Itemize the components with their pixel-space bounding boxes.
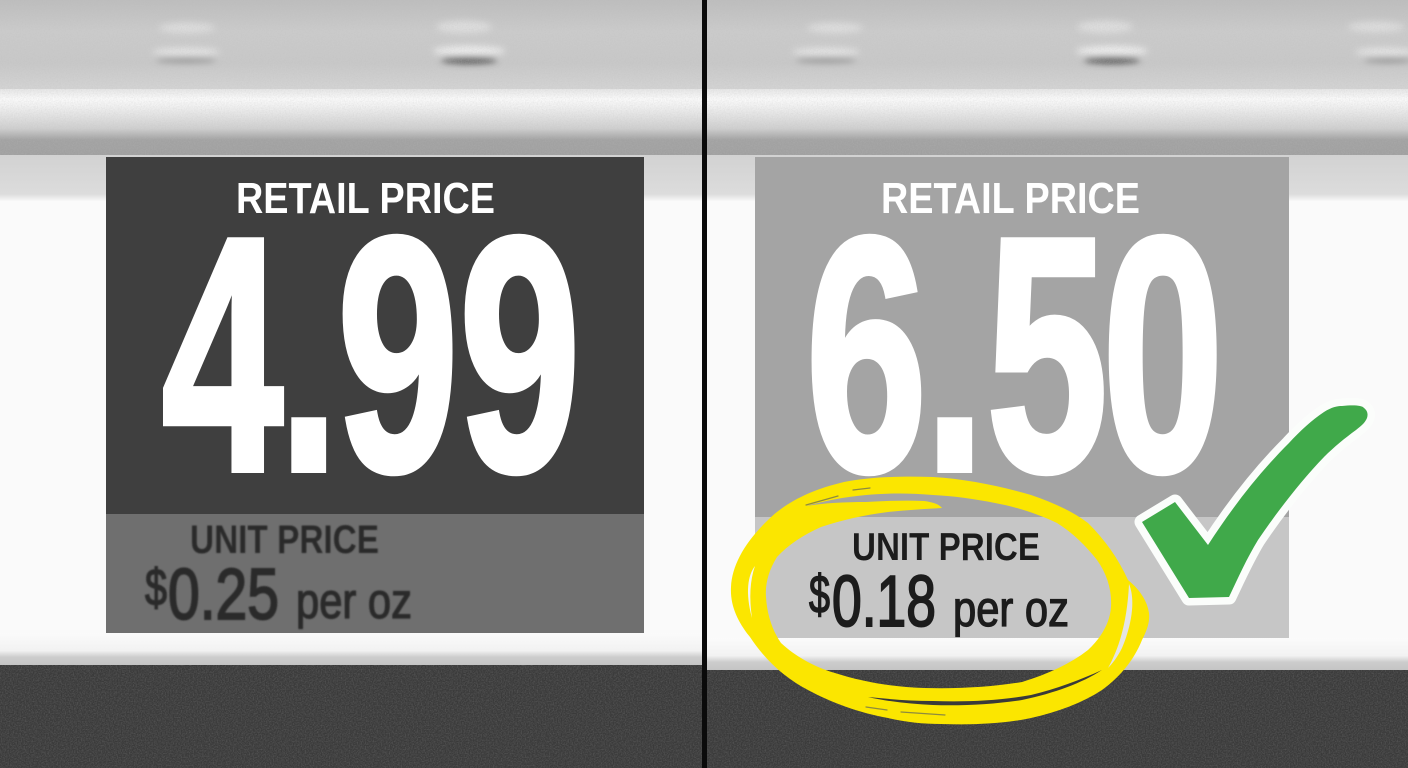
right unit price value — [809, 562, 1069, 642]
right price: 6.50: 6.50 — [806, 167, 1224, 541]
right shelf background — [707, 0, 1408, 768]
left unit price value — [145, 555, 412, 635]
left price: 4.99: 4.99 — [162, 167, 581, 541]
yellow circle: right sliver — [1108, 584, 1132, 668]
left tag upper section — [106, 157, 644, 515]
right unit price value: per oz — [953, 581, 1069, 637]
left unit price value: 0.25 — [168, 555, 279, 635]
right unit price value: 0.18 — [832, 562, 936, 642]
yellow circle: bottom gap — [868, 670, 1102, 705]
divider between panels — [702, 0, 707, 768]
right heading: retail price: RETAIL PRICE — [881, 174, 1140, 223]
left heading: retail price: RETAIL PRICE — [236, 174, 495, 223]
right tag unit price section — [755, 517, 1289, 638]
icon: green check mark — [1142, 405, 1368, 598]
right unit price value: $ — [809, 565, 830, 625]
panel: left price tag — [0, 0, 702, 768]
left unit price value: per oz — [296, 573, 412, 629]
yellow circle: left sliver — [748, 566, 755, 618]
left tag unit price section — [106, 514, 644, 633]
left unit price value: $ — [145, 559, 167, 617]
icon: yellow hand-drawn circle — [731, 477, 1149, 724]
right unit price label: UNIT PRICE — [852, 526, 1040, 569]
left unit price label: UNIT PRICE — [190, 518, 379, 562]
left shelf background — [0, 0, 702, 768]
panel: right price tag — [707, 0, 1408, 768]
yellow circle: top pen marks — [806, 488, 945, 715]
right tag upper section — [755, 157, 1289, 518]
